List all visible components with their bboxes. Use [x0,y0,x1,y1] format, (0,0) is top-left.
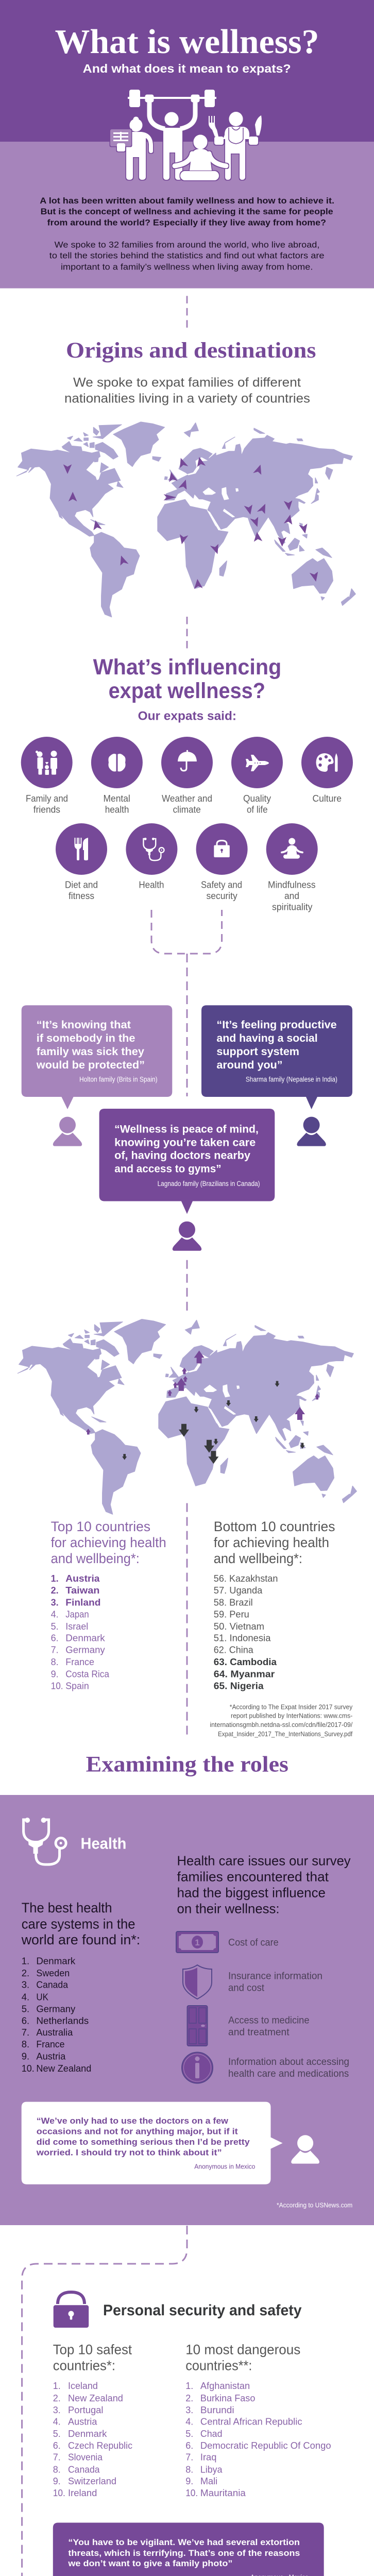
factor: weather and climate [161,737,213,815]
dangerous countries list: 10. [185,2488,198,2498]
safest countries list: 1. [53,2381,61,2391]
bottom 10 countries list: 57. Uganda [214,1585,263,1596]
footnote: usnews: *According to USNews.com [277,2201,352,2209]
origins description: We spoke to expat families of different [73,376,301,390]
dangerous countries list: 9. [185,2476,193,2486]
quote: Lagnado family: of, having doctors nearby [114,1150,250,1161]
bottom 10 countries heading: and wellbeing*: [214,1551,302,1566]
best health care systems list: 6. [22,2015,29,2026]
quote: Holton family [22,1005,172,1109]
issue: information: Information about accessing [228,2057,349,2067]
safest countries list: 3. [53,2405,61,2415]
safest countries heading: countries*: [53,2358,115,2374]
quote: anonymous Mexico, vigilant: we don’t want to give a family photo” [67,2559,232,2568]
quote: anonymous Mexico, vigilant [53,2522,324,2576]
top 10 countries list: 9. [51,1669,59,1680]
bottom 10 countries list: 58. Brazil [214,1598,253,1608]
quote: anonymous in Mexico, doctors: “We’ve only had to use the doctors on a few [37,2116,228,2126]
subheading: our expats said: Our expats said: [138,709,236,723]
top 10 countries list: 10. [51,1681,63,1691]
icon: padlock [54,2292,89,2328]
best health care systems list: Australia [36,2027,73,2038]
best health care systems list: Denmark [36,1956,76,1967]
safest countries list: Ireland [68,2488,97,2498]
best health care systems list: 1. [22,1956,29,1967]
top 10 countries list: 1. [51,1573,59,1584]
dangerous countries list: 1. [185,2381,193,2391]
intro body text: to tell the stories behind the statistics and find out what factors are [49,251,325,261]
factor: mindfulness and spirituality: Mindfulness [268,879,315,890]
subtitle: And what does it mean to expats? [83,62,291,75]
footnote: expat insider: internationsgmbh.netdna-ssl.com/cdn/file/2017-09/ [210,1721,353,1728]
best health care systems list: Germany [36,2004,76,2014]
world map with rank arrows [18,1319,356,1514]
top 10 countries list: 2. [51,1585,59,1596]
top 10 countries list: 7. [51,1645,59,1655]
issue: access to medicine: and treatment [228,2027,290,2038]
top 10 countries list: Denmark [65,1633,106,1643]
top 10 countries list: Spain [65,1681,89,1691]
top 10 countries list: Costa Rica [65,1669,110,1680]
bottom 10 countries heading [214,1519,335,1566]
best health care systems list: 8. [22,2039,29,2049]
intro panel [0,142,374,289]
factor: mental health: Mental [103,793,130,804]
quote: Lagnado family: knowing you’re taken care [114,1137,256,1149]
dangerous countries heading: 10 most dangerous [185,2342,300,2358]
best health care systems list: 4. [22,1991,29,2002]
safest countries list: Czech Republic [68,2441,132,2451]
factor: diet and fitness [56,823,107,901]
dangerous countries list: Mauritania [200,2488,246,2498]
top 10 countries list: France [65,1657,94,1667]
world map with family location arrows [16,422,355,617]
quote: Lagnado family: Lagnado family (Brazilians in Canada) [158,1180,260,1188]
intro bold text: But is the concept of wellness and achieving it the same for people [41,207,333,216]
dangerous countries list: Iraq [200,2452,216,2463]
health care issues heading [177,1853,351,1917]
best health care systems heading: The best health [22,1900,112,1916]
quote: anonymous in Mexico, doctors: occasions and not for anything major, but if it [37,2127,238,2137]
best health care systems list: Sweden [36,1968,70,1978]
factor: quality of life: Quality [243,793,271,804]
safest countries list: 9. [53,2476,61,2486]
top 10 countries list: Germany [65,1645,105,1655]
bottom 10 countries list: 56. Kazakhstan [214,1573,278,1584]
footnote: expat insider: report published by InterNations: www.cms- [231,1712,352,1720]
health care issues heading: on their wellness: [177,1901,280,1917]
issue: access to medicine [188,2006,309,2046]
safest countries list: 8. [53,2464,61,2475]
issue: insurance information: and cost [228,1982,265,1993]
origins description [64,376,310,406]
factor: quality of life: of life [247,805,268,815]
best health care systems list: 3. [22,1979,29,1990]
safest countries list: 2. [53,2393,61,2403]
bottom 10 countries list: 62. China [214,1645,254,1655]
factor: quality of life [231,737,283,815]
quote: Sharma family: support system [216,1046,299,1058]
bottom 10 countries heading: Bottom 10 countries [214,1519,335,1534]
best health care systems list: New Zealand [36,2063,91,2074]
quote: Holton family: Holton family (Brits in Spain) [79,1075,158,1083]
quote: Sharma family: and having a social [216,1032,318,1044]
heading: what's influencing expat wellness: What’s influencing [93,655,281,680]
dangerous countries list [185,2381,331,2498]
dangerous countries heading [185,2342,300,2374]
hero illustration: four people doing wellness activities [110,90,262,180]
top 10 countries list [51,1573,110,1691]
factor: health: Health [139,879,164,890]
bottom 10 countries list: 51. Indonesia [214,1633,271,1643]
header band [0,0,374,142]
quote: Sharma family: around you” [216,1059,283,1071]
dangerous countries list: Afghanistan [200,2381,250,2391]
best health care systems list: 9. [22,2050,29,2061]
top 10 countries list: Austria [65,1573,100,1584]
issue: insurance information [183,1965,322,1999]
safest countries list: Slovenia [68,2452,103,2463]
icon: person, white [291,2135,319,2164]
safest countries list: 7. [53,2452,61,2463]
footnote: expat insider [210,1703,353,1738]
safest countries list: 4. [53,2417,61,2427]
quote: Holton family: family was sick they [37,1046,144,1058]
quote: Sharma family [201,1005,352,1109]
best health care systems heading: care systems in the [22,1916,135,1931]
factor: safety and security [196,823,248,901]
quote: anonymous in Mexico, doctors: Anonymous in Mexico [194,2163,255,2171]
top 10 countries list: 6. [51,1633,59,1643]
top 10 countries list: Finland [65,1598,100,1608]
personal security heading: Personal security and safety [103,2302,302,2319]
quote: Sharma family: Sharma family (Nepalese in India) [246,1075,337,1083]
factor: weather and climate: Weather and [162,793,212,804]
best health care systems list: 2. [22,1968,29,1978]
safest countries list: Switzerland [68,2476,116,2486]
panel: health [0,1795,374,2225]
dangerous countries list: Mali [200,2476,217,2486]
safest countries heading [53,2342,132,2374]
issue: insurance information: Insurance information [228,1971,322,1981]
factor: safety and security: Safety and [201,879,242,890]
origins description: nationalities living in a variety of countries [64,392,310,406]
dangerous countries list: Burundi [200,2405,234,2415]
quote: Lagnado family [99,1109,275,1214]
footnote: expat insider: Expat_Insider_2017_The_InterNations_Survey.pdf [218,1730,353,1738]
intro body text [49,240,325,272]
top 10 countries list: Taiwan [65,1585,100,1596]
quote: Holton family: would be protected” [36,1059,145,1071]
best health care systems list [22,1956,91,2074]
health care issues heading: families encountered that [177,1869,329,1885]
top 10 countries heading [51,1519,166,1566]
issue: cost of care: 1 [195,1938,200,1947]
factor: safety and security: security [206,891,237,901]
safest countries list: Portugal [68,2405,103,2415]
dangerous countries list: Democratic Republic Of Congo [200,2441,331,2451]
icon: stethoscope [24,1818,66,1865]
bottom 10 countries list [214,1573,278,1691]
factor: weather and climate: climate [173,805,201,815]
dangerous countries list: Central African Republic [200,2417,302,2427]
intro bold text: A lot has been written about family wellness and how to achieve it. [40,196,334,206]
safest countries list: Canada [68,2464,100,2475]
issue: information [182,2053,349,2083]
top 10 countries list: 8. [51,1657,59,1667]
dangerous countries list: 4. [185,2417,193,2427]
factor: mental health: health [105,805,129,815]
top 10 countries list: Japan [65,1609,89,1620]
quote: anonymous in Mexico, doctors: worried. I should try not to think about it” [36,2148,222,2158]
top 10 countries list: 3. [51,1598,59,1608]
top 10 countries list: 5. [51,1621,59,1632]
quote: Holton family: if somebody in the [37,1032,135,1044]
heading: examining the roles: Examining the roles [86,1753,288,1777]
intro body text: important to a family’s wellness when living away from home. [61,262,313,272]
health care issues heading: had the biggest influence [177,1885,326,1900]
dangerous countries list: 6. [185,2441,193,2451]
factor: culture: Culture [312,793,342,804]
issue: cost of care: Cost of care [228,1937,279,1948]
issue: access to medicine: Access to medicine [228,2015,309,2026]
dangerous countries list: Libya [200,2464,223,2475]
dangerous countries list: Chad [200,2429,223,2439]
issue: cost of care [176,1931,279,1953]
best health care systems list: 5. [22,2004,29,2014]
bottom 10 countries list: 59. Peru [214,1609,249,1620]
top 10 countries heading: for achieving health [51,1535,166,1550]
best health care systems list: UK [36,1991,49,2002]
factor: diet and fitness: Diet and [65,879,98,890]
best health care systems list: 10. [22,2063,35,2074]
top 10 countries list: Israel [65,1621,88,1632]
factor: health [126,823,177,890]
safest countries heading: Top 10 safest [53,2342,132,2358]
best health care systems list: Austria [36,2050,66,2061]
intro body text: We spoke to 32 families from around the world, who live abroad, [55,240,319,249]
quote: anonymous Mexico, vigilant: “You have to be vigilant. We’ve had several extortion [68,2538,300,2547]
heading: what's influencing expat wellness [93,655,281,703]
safest countries list: New Zealand [68,2393,123,2403]
bottom 10 countries list: 65. Nigeria [214,1681,264,1691]
safest countries list [53,2381,132,2498]
factor: mental health [91,737,143,815]
safest countries list: 5. [53,2429,61,2439]
dangerous countries list: 8. [185,2464,193,2475]
quote: Holton family: “It’s knowing that [37,1019,131,1031]
best health care systems heading [21,1900,140,1947]
icon: person, light [53,1117,82,1146]
safest countries list: 6. [53,2441,61,2451]
dangerous countries list: Burkina Faso [200,2393,255,2403]
factor: culture [301,737,353,804]
quote: Sharma family: “It’s feeling productive [216,1019,337,1031]
factor: mindfulness and spirituality [266,823,318,912]
quote: anonymous in Mexico, doctors [22,2102,283,2184]
factor: mindfulness and spirituality: spirituality [272,902,312,912]
top 10 countries heading: Top 10 countries [51,1519,150,1534]
dangerous countries heading: countries**: [185,2358,252,2374]
quote: anonymous in Mexico, doctors: did come to something serious then I’d be pretty [37,2138,250,2147]
safest countries list: Denmark [68,2429,107,2439]
quote: Lagnado family: and access to gyms” [114,1163,222,1175]
top 10 countries list: 4. [51,1609,59,1620]
factor: diet and fitness: fitness [69,891,94,901]
icon: person, mid [173,1222,201,1251]
best health care systems list: Canada [36,1979,69,1990]
dangerous countries list: 7. [185,2452,193,2463]
bottom 10 countries list: 50. Vietnam [214,1621,264,1632]
quote: anonymous Mexico, vigilant: threats, which is terrifying. That’s one of the reasons [68,2549,300,2558]
best health care systems heading: world are found in*: [21,1932,140,1947]
bottom 10 countries heading: for achieving health [214,1535,329,1550]
best health care systems list: Netherlands [36,2015,89,2026]
dangerous countries list: 3. [185,2405,193,2415]
issue: information: health care and medications [228,2069,349,2079]
safest countries list: Iceland [68,2381,98,2391]
factor: mindfulness and spirituality: and [284,891,299,901]
top 10 countries heading: and wellbeing*: [51,1551,140,1566]
heading: origins and destinations: Origins and destinations [66,338,316,363]
heading: what's influencing expat wellness: expat wellness? [109,679,265,703]
intro bold text [40,196,334,227]
best health care systems list: France [36,2039,65,2049]
best health care systems list: 7. [22,2027,29,2038]
quote: Lagnado family: “Wellness is peace of mind, [114,1124,259,1136]
bottom 10 countries list: 63. Cambodia [214,1657,277,1667]
intro bold text: from around the world? Especially if they live away from home? [47,217,326,227]
dangerous countries list: 5. [185,2429,193,2439]
safest countries list: Austria [68,2417,97,2427]
title: What is wellness? [55,23,319,61]
footnote: expat insider: *According to The Expat Insider 2017 survey [230,1703,353,1710]
factor: family and friends: friends [33,805,60,815]
health care issues heading: Health care issues our survey [177,1853,351,1868]
dangerous countries list: 2. [185,2393,193,2403]
safest countries list: 10. [53,2488,65,2498]
factor: family and friends [21,737,73,815]
factor: family and friends: Family and [26,793,68,804]
bottom 10 countries list: 64. Myanmar [214,1669,275,1680]
icon: person, dark [297,1117,326,1146]
health heading: Health [80,1834,126,1853]
